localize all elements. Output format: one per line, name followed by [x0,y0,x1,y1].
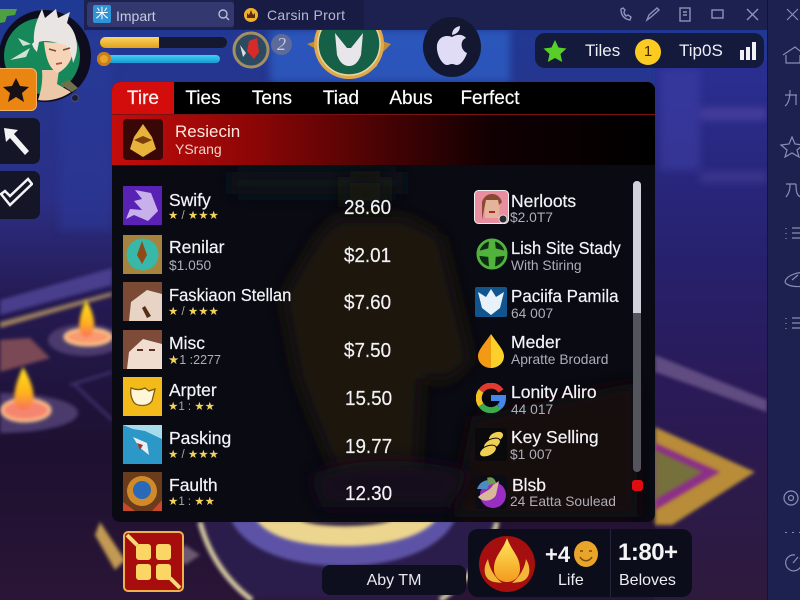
value: $2.01 [344,245,391,267]
name: Arpter [169,380,217,400]
tiles label: Tiles [585,41,620,60]
icon [476,238,508,270]
gold coin: 1 [644,43,652,60]
left list row 6: Pasking [123,425,392,464]
apple icon [436,26,467,65]
icon [475,475,507,509]
right list row 2: Lish Site Stady [476,238,621,273]
name: Pasking [169,428,231,448]
tab: Tire: Tire [127,88,159,109]
name: Blsb [512,475,546,495]
tab bar [112,82,655,114]
subtext: ★1 :2277 [168,353,221,367]
check icon [0,177,33,207]
sidebar icons [780,8,800,572]
icon [474,286,508,318]
banner title: Resiecin [175,122,240,141]
left list row 4: Misc [123,330,391,369]
arrow icon [4,128,29,155]
right list row 1: Nerloots [474,190,576,225]
left list row 1: Swify [123,186,391,225]
leaderboard panel [112,82,655,522]
rating: ★1 : ★★ [168,496,215,508]
right list row 7: Blsb [474,475,624,511]
name: Faulth [169,475,218,495]
icon [474,190,509,224]
subtext: 24 Eatta Soulead [510,494,616,509]
tab: Tiad: Tiad [323,88,359,109]
scrollbar track [633,181,641,472]
banner icon [123,119,163,160]
left list row 2: Renilar [123,235,391,274]
name: Misc [169,333,205,353]
life label: Life [558,572,584,589]
rank number badge: 2 [277,34,286,54]
coin icon [97,52,111,66]
rating: ★1 : ★★ [168,401,215,413]
name: Lonity Aliro [511,382,597,402]
name: Key Selling [511,427,599,447]
name: Nerloots [511,191,576,211]
bottom grid button [123,531,184,592]
divider [610,529,611,597]
icon [123,425,162,464]
value: $7.60 [344,292,391,314]
blue bar [107,55,220,63]
apple logo badge [423,17,481,77]
beloves label: Beloves [619,572,676,589]
rank number badge [271,34,292,55]
icon [123,330,162,369]
app icon [93,5,111,23]
crown badge icon [244,8,258,22]
value: 28.60 [344,197,391,219]
name: Meder [511,332,561,352]
smiley emoji icon [574,541,598,567]
tips label: Tip0S [679,41,723,60]
grid tiles icon [125,533,182,590]
subtext: 44 017 [511,402,553,417]
value: 12.30 [345,483,392,505]
left list row 3: Faskiaon Stellan [123,282,391,321]
tab: Ties: Ties [185,88,221,109]
icon [123,377,162,416]
label text: Aby TM [367,572,421,589]
icon [123,235,162,274]
featured red banner [112,114,655,165]
right list row 5: Lonity Aliro [474,382,624,418]
faded character silhouette [238,171,638,518]
star icon [3,78,29,102]
subtext: $1 007 [510,447,552,462]
import label: Impart [116,8,156,24]
name: Renilar [169,237,224,257]
flame emblem [476,535,538,593]
window controls [620,7,758,22]
bottom stats panel [468,529,692,597]
browser tab: Carsin Prort [234,0,364,29]
subtext: 64 007 [511,306,553,321]
active tab background [112,82,174,114]
name: Swify [169,190,211,210]
icon [477,333,505,369]
signal bars icon [740,42,756,60]
tab: Abus: Abus [389,88,433,109]
app icon: 米 [95,6,108,21]
left list row 5: Arpter [123,377,392,416]
rating: ★ / ★★★ [168,306,219,318]
resource status bar [535,33,764,68]
tab: Tens: Tens [252,88,292,109]
icon [123,186,162,225]
subtext: Apratte Brodard [511,352,608,367]
tab label: Carsin Prort [267,7,345,23]
red scroll marker [632,480,643,491]
name: Paciifa Pamila [511,286,619,306]
rating: ★ / ★★★ [168,210,219,222]
arrow button [0,118,40,164]
top title bar [84,0,767,30]
left list row 7: Faulth [123,472,392,511]
experience bars [97,37,227,66]
guild medal [232,32,270,68]
subtext: $1.050 [169,258,211,273]
right list row 6: Key Selling [474,428,624,464]
green star icon [544,40,566,62]
search box: Import [87,2,234,27]
timer value: 1:80+ [618,539,678,566]
+4 stat value: +4 [545,542,570,567]
check button [0,171,40,219]
right list row 3: Paciifa Pamila [474,286,624,322]
star level button [0,68,37,111]
search icon [218,9,230,20]
value: $7.50 [344,340,391,362]
bottom label pill: Aby TM [322,565,466,595]
rating: ★ / ★★★ [168,449,219,461]
tab: Ferfect: Ferfect [460,88,520,109]
emblem medallion [307,30,391,79]
scrollbar thumb [633,181,641,313]
gold bar [100,37,227,48]
icon [123,472,162,511]
banner subtitle: YSrang [175,141,222,157]
name: Lish Site Stady [511,238,621,258]
value: 19.77 [345,436,392,458]
subtext: $2.0T7 [510,210,553,225]
icon: G [476,383,506,413]
right list row 4: Meder [474,333,624,369]
icon [475,428,507,461]
value: 15.50 [345,388,392,410]
subtext: With Stiring [511,258,582,273]
player avatar portrait [0,9,91,102]
gold coin [635,39,661,65]
name: Faskiaon Stellan [169,285,291,305]
right sidebar [767,0,800,600]
icon [123,282,162,321]
